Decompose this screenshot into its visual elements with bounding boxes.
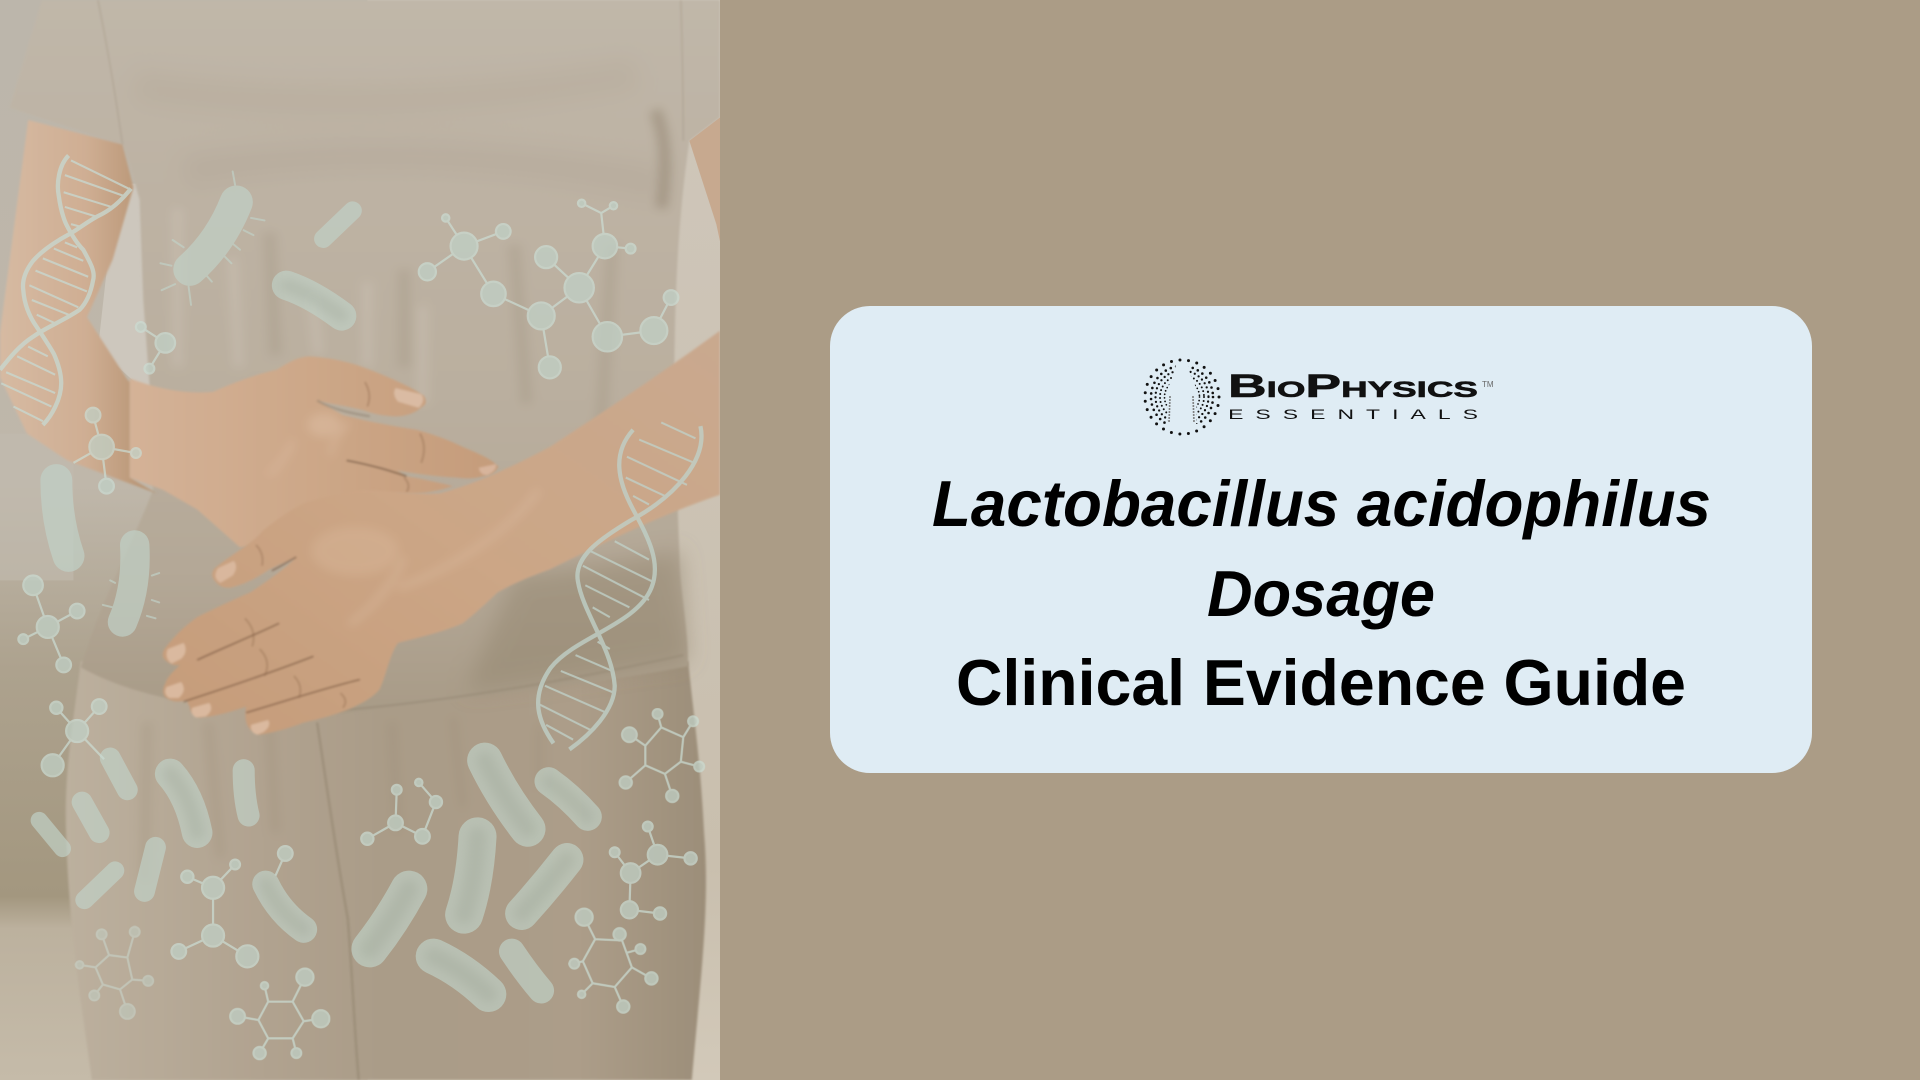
shirt folds <box>178 208 422 404</box>
logo wordmark: B IO P HYSICS <box>1228 368 1478 404</box>
title: Clinical Evidence Guide <box>956 646 1686 719</box>
bacterium spines <box>160 171 264 305</box>
icon: logo dotted circle with body silhouette <box>1145 355 1219 434</box>
background wall <box>0 0 720 1080</box>
icon: molecule networks <box>18 200 697 967</box>
logo wordmark: TM <box>1482 380 1494 389</box>
icon: hexagonal molecules <box>76 709 704 1059</box>
right upper arm <box>689 118 720 241</box>
right forearm and lower hand <box>163 331 720 735</box>
pants <box>66 661 706 1080</box>
logo wordmark: ESSENTIALS <box>1228 407 1478 422</box>
icon: DNA helix right <box>538 422 701 749</box>
panel: title card <box>830 306 1812 773</box>
panel: photo of torso with hands on abdomen and microbiome overlays <box>0 0 720 1080</box>
icon: rod-shaped bacteria <box>39 171 588 994</box>
title <box>932 467 1711 719</box>
bacteria inner shading <box>170 285 588 994</box>
left arm and upper hand <box>0 120 498 547</box>
title: Dosage <box>1207 557 1435 630</box>
card background <box>830 306 1812 773</box>
logo wordmark <box>1228 368 1494 422</box>
t-shirt <box>10 0 720 714</box>
title: Lactobacillus acidophilus <box>932 467 1711 540</box>
icon: DNA helix left <box>0 156 131 425</box>
